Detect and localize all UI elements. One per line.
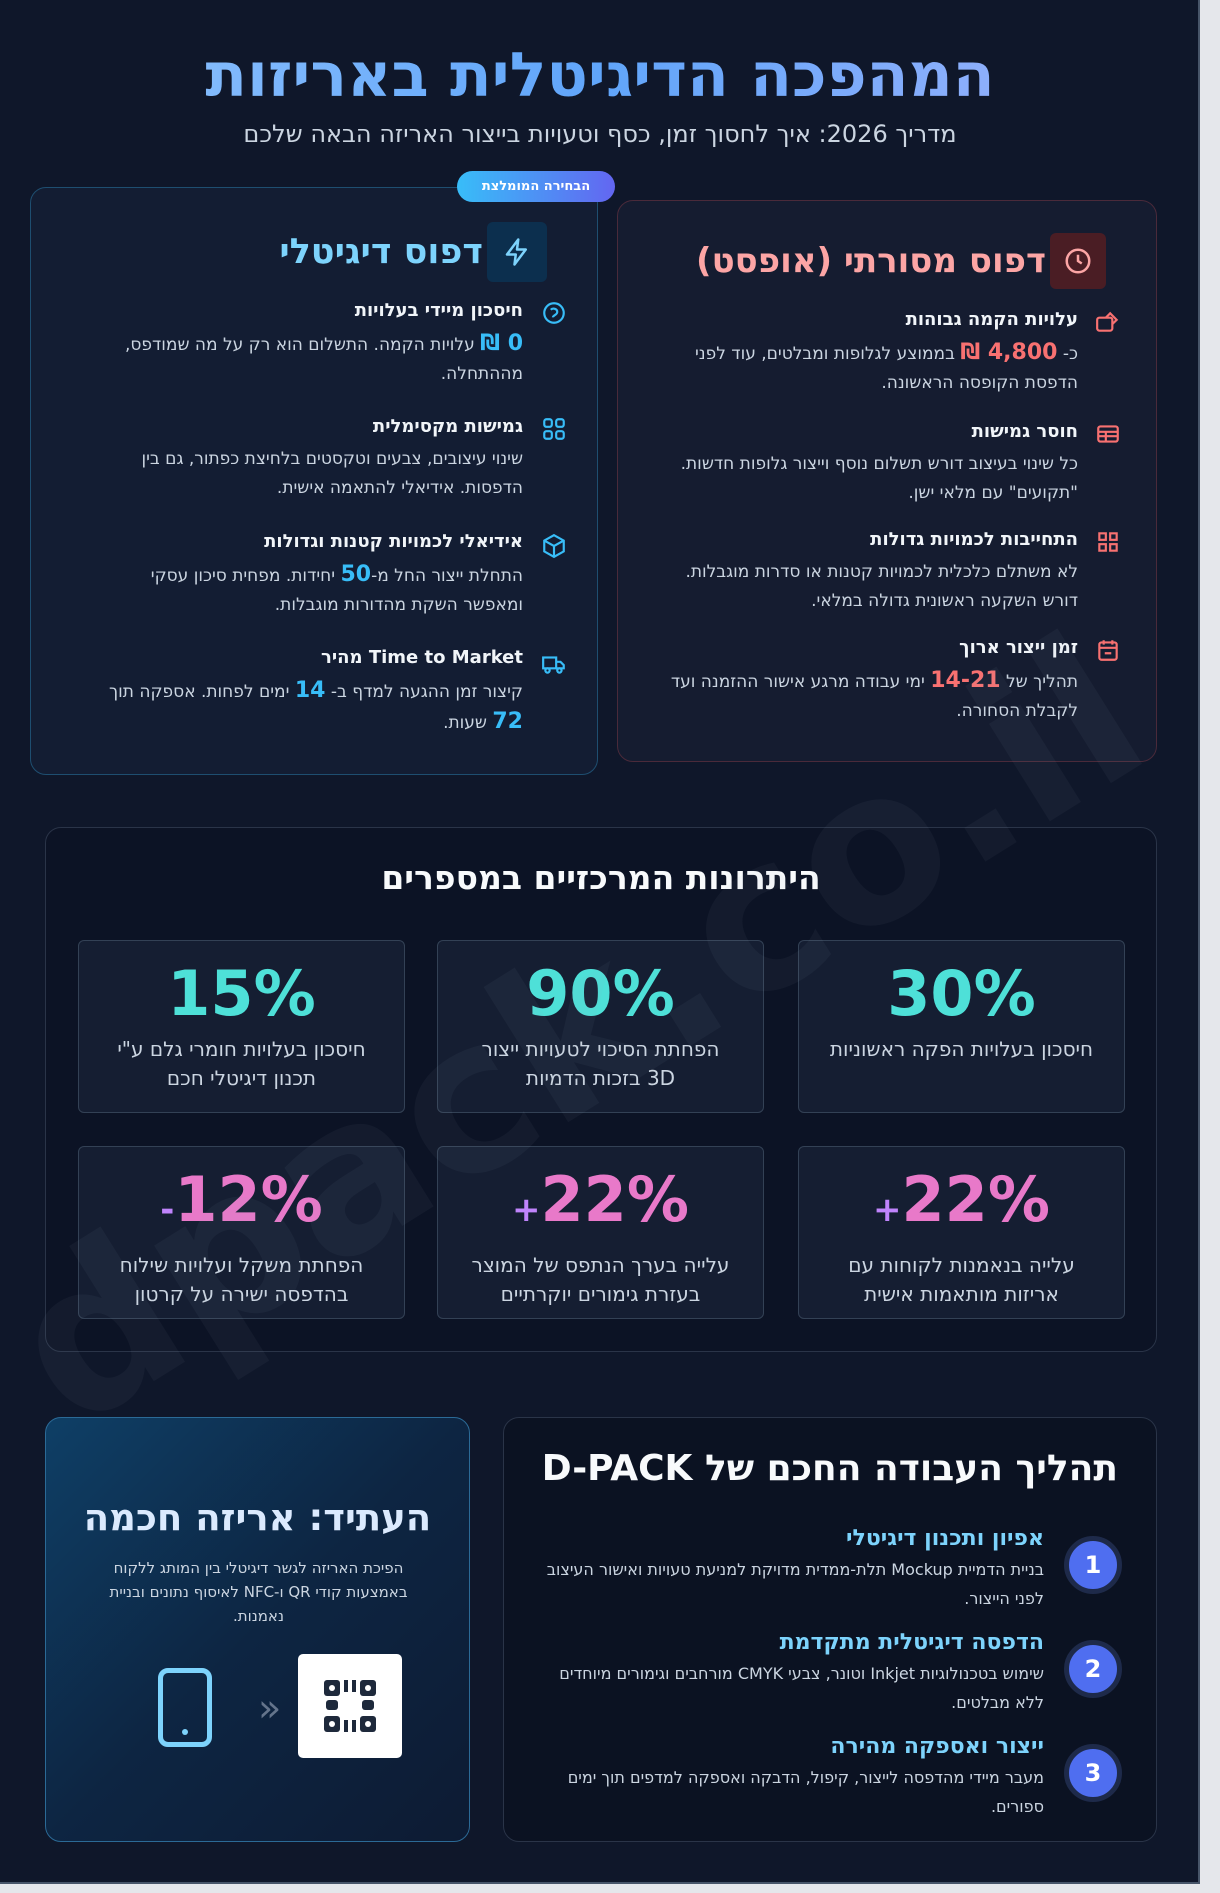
stat: +22% trust: עלייה בנאמנות לקוחות עם	[848, 1253, 1075, 1277]
item: long production time: זמן ייצור ארוך	[959, 637, 1078, 658]
stat: -12%: -12%	[160, 1163, 323, 1236]
watermark: dpack.co.il	[0, 589, 1183, 1474]
panel: traditional offset	[617, 200, 1157, 762]
stat: 15%: תכנון דיגיטלי חכם	[167, 1066, 316, 1090]
panel: D-PACK work process	[503, 1417, 1157, 1842]
item: lack of flexibility: כל שינוי בעיצוב דורש תשלום נוסף וייצור גלופות חדשות. "תקועים" עם מלאי ישן.	[681, 454, 1078, 503]
item: high setup costs: עלויות הקמה גבוהות	[906, 309, 1078, 330]
step 3: 3	[1085, 1759, 1101, 1787]
panel: digital printing	[30, 187, 598, 775]
stat: 15%: 15%	[167, 957, 316, 1030]
item: large quantity commitment: לא משתלם כלכלית לכמויות קטנות או סדרות מוגבלות. דורש השקעה ראשונית גדולה במלאי.	[685, 562, 1078, 611]
panel: key advantages in numbers	[45, 827, 1157, 1352]
stat: 90%: 3D בזכות הדמיות	[526, 1066, 675, 1090]
stat: 30%	[798, 940, 1125, 1113]
stat: +22% trust	[798, 1146, 1125, 1319]
item: small and large quantities: אידיאלי לכמויות קטנות וגדולות	[264, 531, 523, 552]
stat: 15%	[78, 940, 405, 1113]
title: המהפכה הדיגיטלית באריזות	[205, 40, 995, 111]
item: lack of flexibility: חוסר גמישות	[972, 421, 1078, 442]
stat: 15%: חיסכון בעלויות חומרי גלם ע"י	[117, 1037, 366, 1061]
badge: recommended: הבחירה המומלצת	[482, 179, 590, 194]
item: flexibility	[142, 416, 565, 498]
step 2: שימוש בטכנולוגיות Inkjet וטונר, צבעי CMYK מורחבים וגימורים מיוחדים ללא מבלטים.	[559, 1664, 1044, 1712]
item: time to market: Time to Market מהיר	[321, 647, 523, 668]
heading: smart packaging: העתיד: אריזה חכמה	[84, 1496, 431, 1539]
heading: offset: דפוס מסורתי (אופסט)	[696, 241, 1046, 281]
item: long production time: תהליך של 14-21 ימי עבודה מרגע אישור ההזמנה ועד לקבלת הסחורה.	[671, 668, 1078, 721]
item: lack of flexibility	[681, 421, 1119, 503]
item: immediate savings: חיסכון מיידי בעלויות	[355, 300, 523, 321]
stat: +22% value: +22%	[512, 1163, 689, 1236]
stat: 30%: חיסכון בעלויות הפקה ראשוניות	[830, 1037, 1093, 1061]
item: immediate savings: 0 ₪ עלויות הקמה. התשלום הוא רק על מה שמודפס, מההתחלה.	[125, 331, 523, 384]
title	[0, 38, 1200, 114]
step 2	[559, 1630, 1122, 1712]
step 1: אפיון ותכנון דיגיטלי	[846, 1526, 1044, 1551]
stat: -12%	[78, 1146, 405, 1319]
heading: offset	[696, 233, 1106, 289]
item: flexibility: גמישות מקסימלית	[373, 416, 523, 437]
step 1: בניית הדמיית Mockup תלת-ממדית מדויקת למניעת טעויות ואישור העיצוב לפני הייצור.	[547, 1560, 1044, 1608]
item: small and large quantities	[151, 531, 565, 615]
heading: digital: דפוס דיגיטלי	[279, 232, 483, 272]
item: small and large quantities: התחלת ייצור החל מ-50 יחידות. מפחית סיכון עסקי ומאפשר השקת מהדורות מוגבלות.	[151, 562, 523, 615]
icon: QR code	[298, 1654, 402, 1758]
icon: clock	[1050, 233, 1106, 289]
item: high setup costs: כ- 4,800 ₪ בממוצע לגלופות ומבלטים, עוד לפני הדפסת הקופסה הראשונה.	[695, 340, 1078, 393]
stat: 90%: הפחתת הסיכוי לטעויות ייצור	[482, 1037, 719, 1061]
step 3	[568, 1734, 1122, 1816]
step 1	[547, 1526, 1122, 1608]
stat: +22% value	[437, 1146, 764, 1319]
stat: -12%: בהדפסה ישירה על קרטון	[135, 1282, 348, 1306]
stat: 90%	[437, 940, 764, 1113]
item: immediate savings	[125, 300, 565, 384]
step 3: ייצור ואספקה מהירה	[830, 1734, 1044, 1759]
text: smart packaging description: הפיכת האריזה לגשר דיגיטלי בין המותג ללקוח באמצעות קודי QR ו-NFC לאיסוף נתונים ובניית נאמנות.	[109, 1559, 408, 1625]
panel: the future smart packaging	[45, 1417, 470, 1842]
step 1: 1	[1085, 1551, 1101, 1579]
item: high setup costs	[695, 309, 1118, 393]
heading: process: תהליך העבודה החכם של D-PACK	[542, 1448, 1118, 1489]
stat: -12%: הפחתת משקל ועלויות שילוח	[120, 1253, 363, 1277]
item: large quantity commitment: התחייבות לכמויות גדולות	[870, 529, 1078, 550]
step 2: 2	[1085, 1655, 1101, 1683]
stat: +22% trust: אריזות מותאמות אישית	[864, 1282, 1059, 1306]
heading: advantages: היתרונות המרכזיים במספרים	[381, 858, 821, 897]
stat: +22% value: עלייה בערך הנתפס של המוצר	[472, 1253, 729, 1277]
icon: lightning	[487, 222, 547, 282]
item: long production time	[671, 637, 1118, 721]
heading: digital	[279, 222, 547, 282]
stat: 90%: 90%	[526, 957, 675, 1030]
item: time to market	[109, 647, 565, 734]
stat: +22% trust: +22%	[873, 1163, 1050, 1236]
item: large quantity commitment	[685, 529, 1118, 611]
item: time to market: קיצור זמן ההגעה למדף ב- 14 ימים לפחות. אספקה תוך 72 שעות.	[109, 678, 523, 734]
arrow: chevrons: »	[258, 1686, 281, 1730]
stat: 30%: 30%	[887, 957, 1036, 1030]
step 2: הדפסה דיגיטלית מתקדמת	[780, 1630, 1044, 1655]
badge: recommended	[457, 171, 615, 202]
icon: phone	[158, 1668, 212, 1747]
step 3: מעבר מיידי מהדפסה לייצור, קיפול, הדבקה ואספקה למדפים תוך ימים ספורים.	[568, 1768, 1044, 1816]
stat: +22% value: בעזרת גימורים יוקרתיים	[501, 1282, 700, 1306]
subtitle: מדריך 2026: איך לחסוך זמן, כסף וטעויות בייצור האריזה הבאה שלכם	[243, 120, 957, 148]
item: flexibility: שינוי עיצובים, צבעים וטקסטים בלחיצת כפתור, גם בין הדפסות. אידיאלי להתאמה אישית.	[142, 449, 523, 498]
